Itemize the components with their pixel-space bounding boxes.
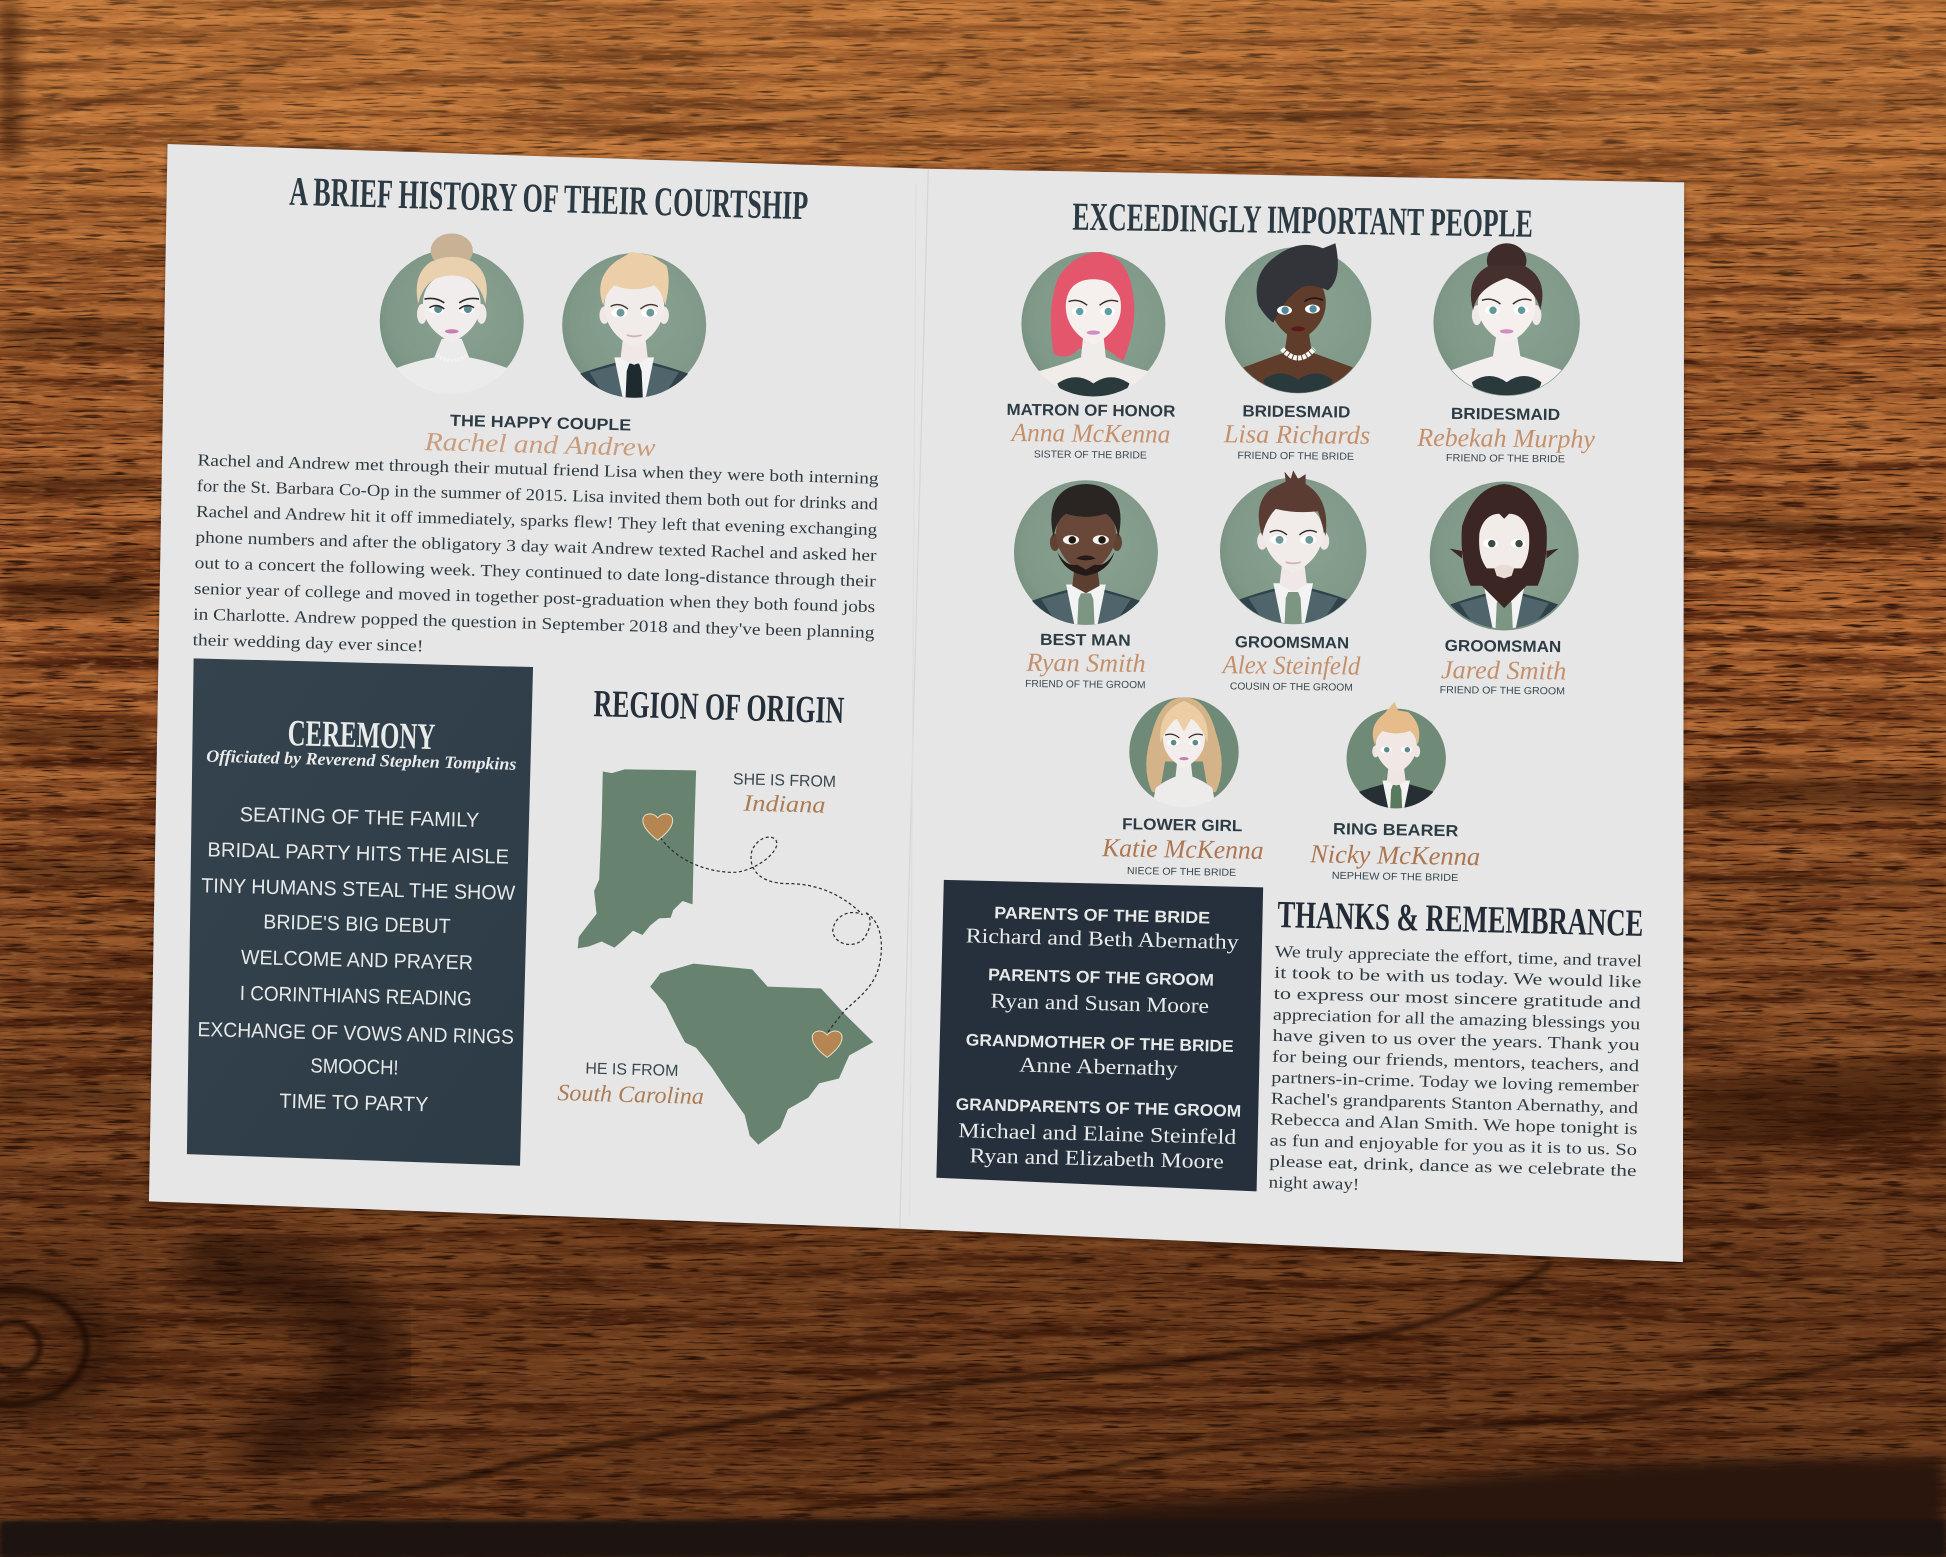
label: Katie McKenna: NIECE OF THE BRIDE (1127, 866, 1236, 879)
label: Nicky McKenna (1309, 820, 1480, 884)
avatar: Lisa (1225, 243, 1371, 397)
thanks and remembrance text (1268, 942, 1643, 1201)
officiant: Officiated by Reverend Stephen Tompkins (206, 747, 517, 774)
label: Lisa Richards: FRIEND OF THE BRIDE (1237, 451, 1354, 463)
label: Anna McKenna: MATRON OF HONOR (1006, 401, 1176, 421)
thanks and remembrance text: please eat, drink, dance as we celebrate the (1269, 1152, 1637, 1180)
label: she is from: SHE IS FROM (733, 770, 836, 791)
label: the happy couple (423, 412, 657, 462)
label: Anna McKenna: Anna McKenna (1009, 418, 1171, 449)
label: Jared Smith: Jared Smith (1441, 655, 1566, 686)
label: Jared Smith (1440, 637, 1566, 697)
courtship story text: Rachel and Andrew met through their mutual friend Lisa when they were both interning (197, 450, 880, 488)
thanks and remembrance text: appreciation for all the amazing blessings you (1273, 1005, 1641, 1033)
state name: Indiana: Indiana (742, 791, 826, 819)
heading: courtship: A BRIEF HISTORY OF THEIR COURTSHIP (289, 169, 809, 228)
state name: South Carolina: South Carolina (557, 1080, 704, 1110)
order of service: SMOOCH! (310, 1054, 399, 1080)
label: Rebekah Murphy: FRIEND OF THE BRIDE (1446, 453, 1565, 465)
label: Katie McKenna: Katie McKenna (1101, 833, 1264, 865)
label: Katie McKenna (1101, 815, 1264, 879)
role: THE HAPPY COUPLE (450, 412, 632, 435)
map: Indiana (578, 769, 696, 948)
family names: PARENTS OF THE BRIDE (994, 903, 1210, 927)
label: Alex Steinfeld: Alex Steinfeld (1220, 650, 1361, 681)
label: Alex Steinfeld (1220, 633, 1361, 694)
label: Ryan Smith: BEST MAN (1040, 631, 1131, 650)
family names: Ryan and Susan Moore (990, 989, 1209, 1018)
label: Ryan Smith: FRIEND OF THE GROOM (1025, 679, 1146, 691)
order of service: BRIDE'S BIG DEBUT (263, 910, 451, 938)
family names: Anne Abernathy (1019, 1053, 1179, 1080)
order of service (197, 803, 516, 1116)
thanks and remembrance text: Rachel's grandparents Stanton Abernathy, and (1271, 1089, 1639, 1117)
label: Rebekah Murphy (1416, 405, 1595, 465)
courtship story text: Rachel and Andrew hit it off immediately, sparks flew! They left that evening exchanging (196, 502, 878, 539)
family names: GRANDMOTHER OF THE BRIDE (965, 1030, 1234, 1056)
dark foreground band (0, 1458, 1946, 1557)
thanks and remembrance text: it took to be with us today. We would like (1274, 963, 1642, 991)
order of service: WELCOME AND PRAYER (241, 946, 473, 975)
label: Lisa Richards (1223, 402, 1370, 463)
paper shadow (149, 144, 1684, 1265)
order of service: BRIDAL PARTY HITS THE AISLE (207, 838, 509, 869)
family names: Michael and Elaine Steinfeld (958, 1118, 1237, 1149)
order of service: EXCHANGE OF VOWS AND RINGS (197, 1018, 514, 1049)
avatar: Anna (1021, 252, 1165, 401)
avatar: Ryan (1014, 480, 1158, 629)
avatar: Rebekah (1433, 243, 1580, 400)
ceremony heading: CEREMONY (287, 713, 436, 758)
courtship story text (192, 450, 880, 668)
label: Rebekah Murphy: BRIDESMAID (1451, 405, 1560, 424)
thanks and remembrance text: partners-in-crime. Today we loving remember (1271, 1068, 1639, 1096)
heading: region of origin: REGION OF ORIGIN (593, 683, 845, 732)
label: Katie McKenna: FLOWER GIRL (1122, 815, 1243, 835)
courtship story text: for the St. Barbara Co-Op in the summer of 2015. Lisa invited them both out for drinks and (197, 476, 879, 514)
label: Nicky McKenna: RING BEARER (1333, 820, 1459, 840)
avatar: Katie (1129, 697, 1239, 809)
family names: GRANDPARENTS OF THE GROOM (956, 1095, 1241, 1121)
panel: family (936, 880, 1263, 1191)
label: Jared Smith: GROOMSMAN (1445, 637, 1561, 656)
family names: Richard and Beth Abernathy (965, 923, 1240, 954)
label: Nicky McKenna: Nicky McKenna (1309, 839, 1480, 871)
icon: Indiana heart (643, 814, 673, 840)
thanks and remembrance text: to express our most sincere gratitude and (1273, 984, 1642, 1012)
heading: thanks and remembrance: THANKS & REMEMBRANCE (1277, 894, 1644, 945)
label: Ryan Smith: Ryan Smith (1025, 648, 1146, 678)
label: Alex Steinfeld: COUSIN OF THE GROOM (1230, 681, 1353, 694)
label: Anna McKenna (1006, 401, 1176, 462)
panel: ceremony (187, 658, 533, 1166)
order of service: TINY HUMANS STEAL THE SHOW (201, 874, 516, 905)
courtship story text: in Charlotte. Andrew popped the question in September 2018 and they've been planning (193, 604, 875, 642)
courtship story text: out to a concert the following week. They continued to date long-distance through their (194, 553, 877, 591)
map: South Carolina (650, 964, 873, 1145)
family names: PARENTS OF THE GROOM (988, 965, 1214, 990)
thanks and remembrance text: have given to us over the years. Thank you (1272, 1026, 1641, 1054)
label: he is from: HE IS FROM (585, 1060, 679, 1080)
courtship story text: their wedding day ever since! (192, 630, 424, 655)
order of service: I CORINTHIANS READING (239, 982, 472, 1011)
label: Lisa Richards: Lisa Richards (1223, 419, 1370, 450)
courtship story text: senior year of college and moved in together post-graduation when they both found jobs (194, 579, 875, 616)
avatar: Jared (1430, 482, 1579, 633)
thanks and remembrance text: for being our friends, mentors, teachers, and (1272, 1047, 1640, 1075)
order of service: TIME TO PARTY (279, 1090, 429, 1116)
label: Ryan Smith (1025, 631, 1146, 691)
label: Nicky McKenna: NEPHEW OF THE BRIDE (1332, 871, 1459, 884)
names: Rachel and Andrew (423, 427, 657, 462)
label: Alex Steinfeld: GROOMSMAN (1235, 633, 1349, 652)
folded program paper (149, 144, 1684, 1262)
thanks and remembrance text: night away! (1268, 1172, 1360, 1194)
label: he is from (557, 1060, 704, 1110)
thanks and remembrance text: We truly appreciate the effort, time, and travel (1274, 942, 1643, 970)
family names: Ryan and Elizabeth Moore (969, 1143, 1224, 1173)
heading: exceedingly important people: EXCEEDINGLY IMPORTANT PEOPLE (1072, 195, 1533, 246)
icon: South Carolina heart (812, 1031, 842, 1057)
avatar: Alex (1220, 470, 1366, 628)
thanks and remembrance text: Rebecca and Alan Smith. We hope tonight is (1270, 1110, 1638, 1138)
order of service: SEATING OF THE FAMILY (239, 803, 480, 832)
label: Rebekah Murphy: Rebekah Murphy (1416, 423, 1595, 454)
thanks and remembrance text: as fun and enjoyable for you as it is to us. So (1270, 1131, 1637, 1159)
dashed route between states (660, 837, 881, 1035)
avatar: Nicky (1347, 702, 1446, 811)
label: Lisa Richards: BRIDESMAID (1242, 402, 1350, 422)
avatar: Rachel (380, 233, 524, 368)
courtship story text: phone numbers and after the obligatory 3 day wait Andrew texted Rachel and asked her (195, 527, 877, 565)
label: she is from (733, 770, 836, 819)
label: Jared Smith: FRIEND OF THE GROOM (1440, 685, 1565, 697)
avatar: Andrew (562, 252, 706, 402)
family names (956, 903, 1241, 1173)
label: Anna McKenna: SISTER OF THE BRIDE (1034, 449, 1147, 462)
